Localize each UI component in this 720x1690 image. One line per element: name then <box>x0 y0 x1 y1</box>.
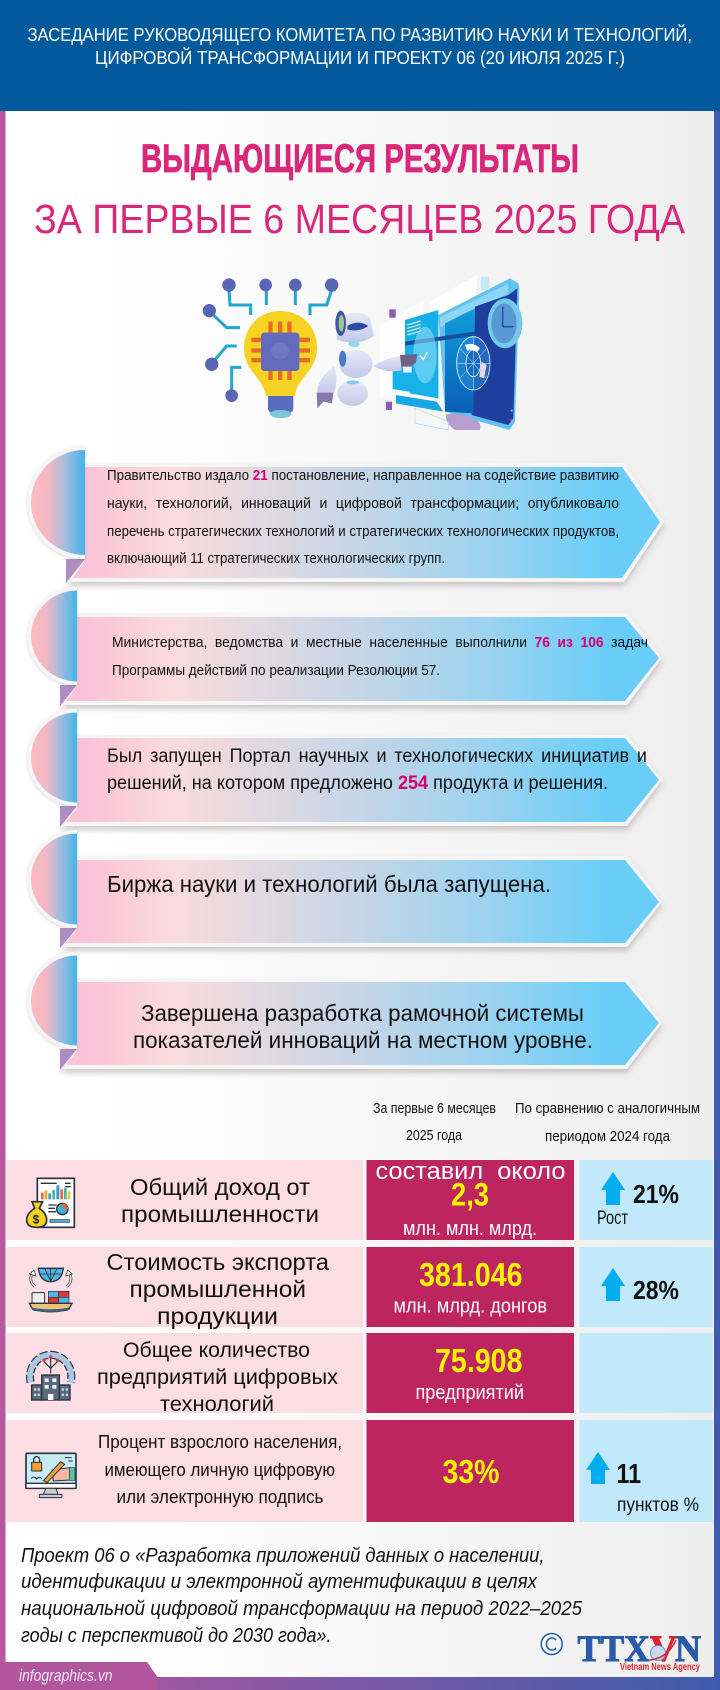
note about Project 06 <box>21 1545 583 1647</box>
row 1 growth: Рост <box>597 1208 628 1229</box>
panel: arrow 5 <box>28 952 662 1070</box>
row 3 value: 75.908 <box>435 1342 522 1379</box>
row 2 label <box>106 1249 329 1329</box>
illustration part: robot <box>317 311 417 408</box>
logo: TTXVN Vietnam News Agency: V <box>650 1629 677 1670</box>
table column headers: По сравнению с аналогичным <box>515 1100 700 1117</box>
row 2 value: 381.046 <box>419 1256 522 1293</box>
row 3: digital technology enterprises <box>6 1333 712 1416</box>
illustration: light bulb, robot and digital screen <box>203 275 522 430</box>
row 2 label: промышленной <box>130 1276 306 1302</box>
row 3 value <box>416 1342 524 1404</box>
logo: TTXVN Vietnam News Agency: N <box>675 1629 701 1670</box>
panel: arrow 4 <box>28 830 662 948</box>
panel: arrow 2 <box>28 587 662 706</box>
row 1 value: млн. млн. млрд. <box>403 1218 537 1240</box>
row 2 label: Стоимость экспорта <box>106 1249 329 1275</box>
logo: TTXVN Vietnam News Agency <box>541 1629 701 1673</box>
row 1 value <box>376 1158 566 1240</box>
row 4 growth <box>586 1452 699 1516</box>
table column headers: За первые 6 месяцев <box>373 1100 496 1117</box>
footer band: infographics.vn <box>19 1666 112 1685</box>
row 3 label: Общее количество <box>123 1339 310 1362</box>
panel: arrow 1: Правительство издало 21 постановление, направленное на содействие развитию <box>107 467 619 484</box>
table column headers <box>373 1100 700 1145</box>
left border <box>0 0 6 1690</box>
row 2 growth: 28% <box>633 1275 679 1305</box>
note about Project 06: идентификации и электронной аутентификации в целях <box>21 1571 538 1593</box>
panel: arrow 3 <box>28 709 662 827</box>
note about Project 06: Проект 06 о «Разработка приложений данных о населении, <box>21 1545 544 1567</box>
row 2 growth <box>601 1268 679 1305</box>
icon: report and money bag: $ <box>33 1212 40 1226</box>
row 4 label <box>98 1432 342 1507</box>
row 4 growth: пунктов % <box>617 1495 699 1516</box>
icon: report and money bag <box>27 1178 74 1227</box>
row 4 value: 33% <box>442 1453 500 1490</box>
table column headers: периодом 2024 года <box>545 1128 671 1145</box>
row 1: total industry revenue <box>6 1158 712 1240</box>
title <box>34 137 686 242</box>
table column headers: 2025 года <box>406 1127 463 1144</box>
row 4: adults with digital signature <box>6 1420 712 1522</box>
panel: arrow 2: Министерства, ведомства и местные населенные выполнили 76 из 106 задач <box>112 634 648 651</box>
footer band <box>0 1662 720 1690</box>
illustration part: digital screen <box>380 275 522 430</box>
illustration part: light bulb with chip and circuit nodes <box>203 278 338 418</box>
icon: monitor with lock and pen <box>26 1453 76 1498</box>
row 1 value: 2,3 <box>451 1176 489 1212</box>
panel: arrow 1 <box>27 446 664 583</box>
row 4 label: Процент взрослого населения, <box>98 1432 342 1452</box>
panel: arrow 2: Программы действий по реализации Резолюции 57. <box>112 662 440 679</box>
header band: ЦИФРОВОЙ ТРАНСФОРМАЦИИ И ПРОЕКТУ 06 (20 ИЮЛЯ 2025 Г.) <box>95 47 625 68</box>
row 1 growth <box>597 1172 679 1229</box>
header band <box>0 0 720 111</box>
row 1 label: промышленности <box>121 1201 319 1227</box>
row 1 label: Общий доход от <box>130 1174 310 1200</box>
row 3 value: предприятий <box>416 1382 524 1404</box>
row 1 growth: 21% <box>633 1179 679 1209</box>
panel: arrow 1: включающий 11 стратегических технологических групп. <box>107 550 445 567</box>
row 4 label: имеющего личную цифровую <box>104 1460 335 1480</box>
note about Project 06: национальной цифровой трансформации на период 2022–2025 <box>21 1598 583 1620</box>
panel: arrow 1: науки, технологий, инноваций и цифровой трансформации; опубликовало <box>107 495 619 512</box>
row 3 label: технологий <box>160 1393 274 1416</box>
row 2: industrial export value <box>6 1247 712 1329</box>
panel: arrow 3: Был запущен Портал научных и технологических инициатив и <box>107 746 647 767</box>
icon: globe and cargo ship <box>29 1268 72 1312</box>
row 4 label: или электронную подпись <box>116 1487 324 1507</box>
row 3 label <box>97 1339 339 1416</box>
panel: arrow 1: перечень стратегических технологий и стратегических технологических продуктов, <box>107 523 619 540</box>
row 4 growth: 11 <box>616 1458 641 1489</box>
panel: arrow 5: показателей инноваций на местном уровне. <box>133 1027 593 1053</box>
logo: TTXVN Vietnam News Agency: TTX <box>578 1629 650 1670</box>
panel: arrow 4: Биржа науки и технологий была запущена. <box>107 871 551 897</box>
row 3 label: предприятий цифровых <box>97 1366 339 1389</box>
row 2 label: продукции <box>157 1303 278 1329</box>
row 1 value: составил около <box>376 1158 566 1185</box>
panel: arrow 5: Завершена разработка рамочной системы <box>141 1000 584 1026</box>
panel: arrow 3: решений, на котором предложено 254 продукта и решения. <box>107 773 608 794</box>
row 1 label <box>121 1174 319 1227</box>
right border <box>714 0 720 1690</box>
row 2 value <box>394 1256 547 1318</box>
icon: gear and office building <box>30 1355 71 1400</box>
row 2 value: млн. млрд. донгов <box>394 1296 547 1318</box>
note about Project 06: годы с перспективой до 2030 года». <box>21 1625 332 1647</box>
